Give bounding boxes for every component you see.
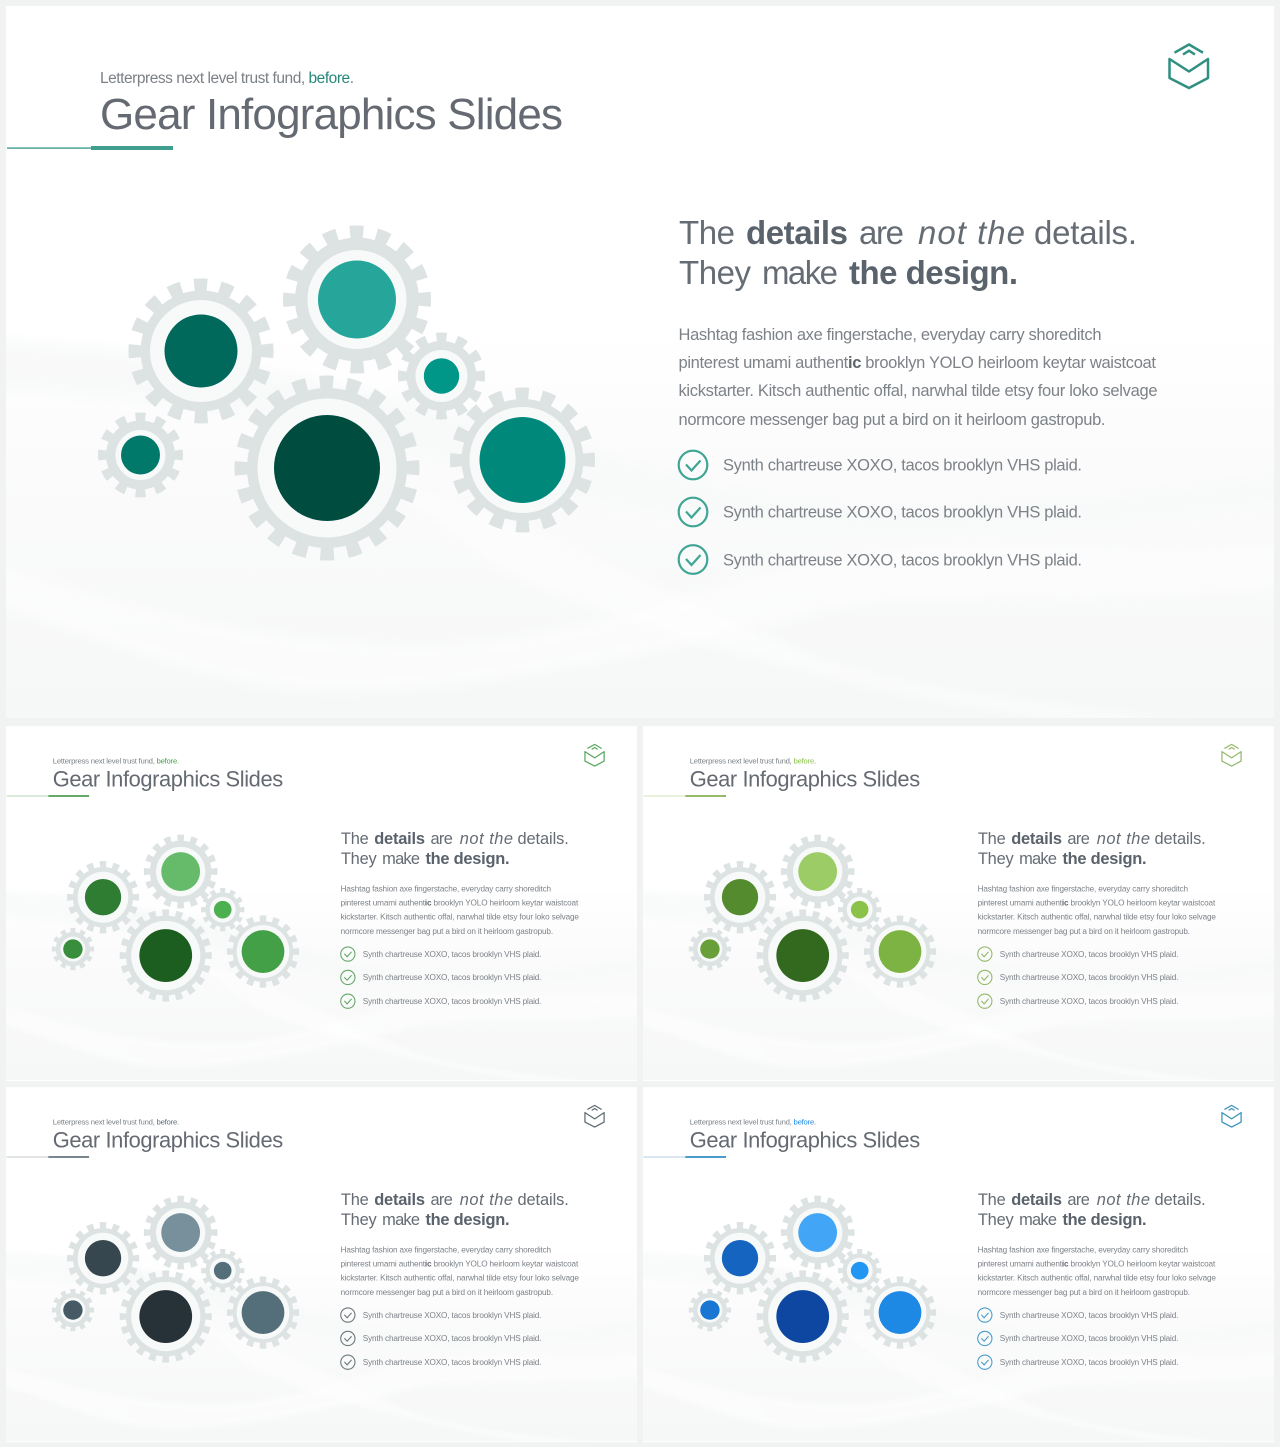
title: Gear Infographics Slides	[690, 766, 920, 792]
heading: They	[679, 254, 752, 291]
body text: kickstarter. Kitsch authentic offal, narwhal tilde etsy four loko selvage	[978, 913, 1216, 922]
check item 3	[679, 545, 1082, 574]
heading: make	[382, 1211, 420, 1229]
check item 3	[341, 1355, 541, 1369]
body text: normcore messenger bag put a bird on it heirloom gastropub.	[978, 927, 1190, 936]
check item 2: Synth chartreuse XOXO, tacos brooklyn VHS plaid.	[723, 504, 1082, 522]
heading: details	[374, 1191, 425, 1209]
subtitle: Letterpress next level trust fund, before.	[53, 1118, 179, 1127]
gear: small right	[204, 890, 242, 929]
checklist	[341, 947, 541, 1008]
heading	[978, 830, 1206, 868]
icon: cube logo	[1170, 44, 1208, 88]
heading: details.	[1155, 1191, 1206, 1209]
body text: pinterest umami authentic brooklyn YOLO heirloom keytar waistcoat	[978, 899, 1216, 908]
icon: cube logo	[585, 1105, 604, 1127]
heading: details.	[518, 830, 569, 848]
heading	[341, 1191, 569, 1229]
heading: The	[978, 1191, 1006, 1209]
heading: details.	[1155, 830, 1206, 848]
heading: They	[978, 850, 1014, 868]
gear: large centre	[760, 1274, 845, 1359]
gear: top	[784, 1199, 851, 1266]
body text: Hashtag fashion axe fingerstache, everyday carry shoreditch	[978, 885, 1189, 894]
title underline	[643, 795, 726, 797]
gear: top	[147, 838, 214, 905]
check item 2: Synth chartreuse XOXO, tacos brooklyn VHS plaid.	[1000, 1334, 1178, 1343]
check item 1	[679, 451, 1082, 479]
gear: upper left	[70, 1226, 136, 1291]
gear: large centre	[123, 913, 208, 998]
icon: cube logo	[1222, 1105, 1241, 1127]
body text	[978, 885, 1216, 936]
heading: details.	[1034, 214, 1137, 251]
checklist	[341, 1308, 541, 1369]
body text: pinterest umami authentic brooklyn YOLO heirloom keytar waistcoat	[978, 1260, 1216, 1269]
body text: Hashtag fashion axe fingerstache, everyday carry shoreditch	[341, 885, 552, 894]
gear: small right	[841, 1251, 879, 1290]
body text: kickstarter. Kitsch authentic offal, narwhal tilde etsy four loko selvage	[341, 1274, 579, 1283]
panel: green slide	[0, 726, 650, 1084]
check item 3	[978, 1355, 1178, 1369]
subtitle: Letterpress next level trust fund, before.	[53, 757, 179, 766]
gear: large centre	[123, 1274, 208, 1359]
heading: They	[341, 850, 377, 868]
check item 2	[341, 970, 541, 985]
check item 1: Synth chartreuse XOXO, tacos brooklyn VHS plaid.	[363, 950, 541, 959]
heading: The	[679, 214, 735, 251]
body text: kickstarter. Kitsch authentic offal, narwhal tilde etsy four loko selvage	[341, 913, 579, 922]
check item 3: Synth chartreuse XOXO, tacos brooklyn VHS plaid.	[1000, 997, 1178, 1006]
gear: right	[867, 919, 933, 984]
body text: pinterest umami authentic brooklyn YOLO heirloom keytar waistcoat	[678, 354, 1156, 372]
gear: right	[457, 394, 588, 526]
gear: small right	[204, 1251, 242, 1290]
gear: right	[230, 1280, 296, 1345]
title underline	[7, 146, 173, 150]
check item 3: Synth chartreuse XOXO, tacos brooklyn VHS plaid.	[723, 552, 1082, 570]
check item 1: Synth chartreuse XOXO, tacos brooklyn VHS plaid.	[1000, 950, 1178, 959]
subtitle: Letterpress next level trust fund, before.	[690, 757, 816, 766]
body text	[678, 326, 1158, 429]
heading: They	[978, 1211, 1014, 1229]
subtitle: Letterpress next level trust fund, before.	[100, 70, 354, 87]
heading: details.	[518, 1191, 569, 1209]
heading: the design.	[849, 254, 1018, 291]
heading: not the	[460, 1191, 513, 1209]
heading: details	[374, 830, 425, 848]
body text	[341, 1246, 579, 1297]
check item 3: Synth chartreuse XOXO, tacos brooklyn VHS plaid.	[363, 1358, 541, 1367]
heading: the design.	[425, 1211, 510, 1229]
gear: upper left	[70, 865, 136, 930]
check item 3	[341, 994, 541, 1008]
heading	[978, 1191, 1206, 1229]
heading: the design.	[425, 850, 510, 868]
body text: Hashtag fashion axe fingerstache, everyday carry shoreditch	[341, 1246, 552, 1255]
check item 1: Synth chartreuse XOXO, tacos brooklyn VHS plaid.	[1000, 1311, 1178, 1320]
check item 2	[978, 1331, 1178, 1346]
gear: small left	[691, 930, 729, 968]
heading: not the	[1097, 830, 1150, 848]
check item 2: Synth chartreuse XOXO, tacos brooklyn VHS plaid.	[1000, 973, 1178, 982]
check item 1	[978, 1308, 1178, 1322]
panel: light green slide	[630, 726, 1280, 1084]
gear: top	[290, 232, 424, 366]
title: Gear Infographics Slides	[100, 90, 563, 139]
checklist	[978, 947, 1178, 1008]
gear: upper left	[136, 286, 266, 416]
heading: are	[859, 214, 904, 251]
heading: The	[341, 1191, 369, 1209]
check item 1: Synth chartreuse XOXO, tacos brooklyn VHS plaid.	[723, 456, 1082, 474]
heading: not the	[460, 830, 513, 848]
body text: normcore messenger bag put a bird on it heirloom gastropub.	[978, 1288, 1190, 1297]
heading	[679, 214, 1137, 291]
gear: upper left	[707, 865, 773, 930]
panel: slate slide	[0, 1087, 650, 1445]
heading: details	[746, 214, 848, 251]
gear: small left	[691, 1291, 729, 1329]
gear: top	[784, 838, 851, 905]
title underline	[643, 1156, 726, 1158]
heading: The	[341, 830, 369, 848]
icon: cube logo	[1222, 744, 1241, 766]
heading: the design.	[1062, 1211, 1147, 1229]
heading: make	[1019, 1211, 1057, 1229]
check item 1: Synth chartreuse XOXO, tacos brooklyn VHS plaid.	[363, 1311, 541, 1320]
heading: are	[430, 1191, 453, 1209]
panel: main teal slide	[0, 6, 1280, 725]
check item 2	[341, 1331, 541, 1346]
subtitle: Letterpress next level trust fund, before.	[690, 1118, 816, 1127]
gear: small left	[103, 418, 178, 492]
body text: kickstarter. Kitsch authentic offal, narwhal tilde etsy four loko selvage	[678, 382, 1158, 400]
icon: cube logo	[585, 744, 604, 766]
gear: top	[147, 1199, 214, 1266]
heading: the design.	[1062, 850, 1147, 868]
title: Gear Infographics Slides	[53, 766, 283, 792]
gear: right	[230, 919, 296, 984]
gear: upper left	[707, 1226, 773, 1291]
body text: normcore messenger bag put a bird on it heirloom gastropub.	[341, 1288, 553, 1297]
checklist	[978, 1308, 1178, 1369]
title: Gear Infographics Slides	[690, 1127, 920, 1153]
gear: small left	[54, 1291, 92, 1329]
check item 1	[978, 947, 1178, 961]
heading: are	[1067, 1191, 1090, 1209]
heading: details	[1011, 830, 1062, 848]
panel: blue slide	[630, 1087, 1280, 1445]
check item 3: Synth chartreuse XOXO, tacos brooklyn VHS plaid.	[363, 997, 541, 1006]
check item 2: Synth chartreuse XOXO, tacos brooklyn VHS plaid.	[363, 973, 541, 982]
heading	[341, 830, 569, 868]
body text: kickstarter. Kitsch authentic offal, narwhal tilde etsy four loko selvage	[978, 1274, 1216, 1283]
heading: are	[1067, 830, 1090, 848]
gear: small right	[841, 890, 879, 929]
check item 2	[679, 498, 1082, 526]
heading: are	[430, 830, 453, 848]
heading: not the	[918, 214, 1025, 251]
heading: They	[341, 1211, 377, 1229]
body text: pinterest umami authentic brooklyn YOLO heirloom keytar waistcoat	[341, 899, 579, 908]
body text: normcore messenger bag put a bird on it heirloom gastropub.	[678, 411, 1106, 429]
check item 2: Synth chartreuse XOXO, tacos brooklyn VHS plaid.	[363, 1334, 541, 1343]
title underline	[6, 1156, 89, 1158]
body text: pinterest umami authentic brooklyn YOLO heirloom keytar waistcoat	[341, 1260, 579, 1269]
check item 3	[978, 994, 1178, 1008]
gear: large centre	[242, 383, 412, 553]
checklist	[679, 451, 1082, 574]
title: Gear Infographics Slides	[53, 1127, 283, 1153]
heading: The	[978, 830, 1006, 848]
heading: make	[762, 254, 838, 291]
body text: Hashtag fashion axe fingerstache, everyday carry shoreditch	[678, 326, 1102, 344]
gear: right	[867, 1280, 933, 1345]
heading: not the	[1097, 1191, 1150, 1209]
heading: details	[1011, 1191, 1062, 1209]
body text	[341, 885, 579, 936]
heading: make	[382, 850, 420, 868]
body text	[978, 1246, 1216, 1297]
gear: small left	[54, 930, 92, 968]
body text: normcore messenger bag put a bird on it heirloom gastropub.	[341, 927, 553, 936]
check item 1	[341, 1308, 541, 1322]
gear: large centre	[760, 913, 845, 998]
title underline	[6, 795, 89, 797]
heading: make	[1019, 850, 1057, 868]
body text: Hashtag fashion axe fingerstache, everyday carry shoreditch	[978, 1246, 1189, 1255]
check item 1	[341, 947, 541, 961]
check item 3: Synth chartreuse XOXO, tacos brooklyn VHS plaid.	[1000, 1358, 1178, 1367]
check item 2	[978, 970, 1178, 985]
gear: small right	[403, 338, 480, 414]
